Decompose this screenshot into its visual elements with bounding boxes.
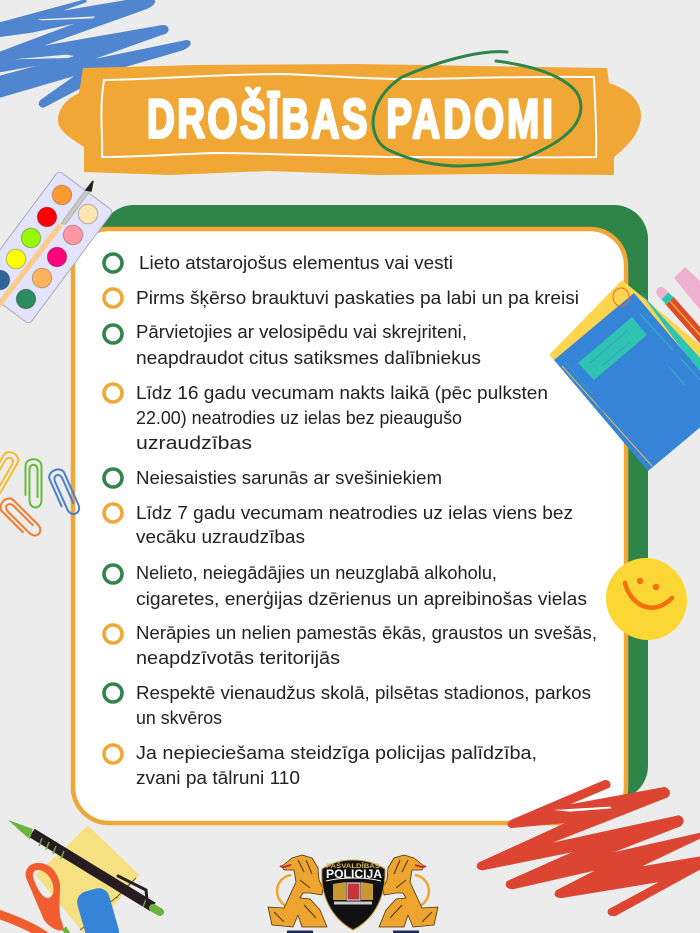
green clip — [26, 459, 42, 508]
tip 4 — [104, 382, 548, 453]
tip 6: Līdz 7 gadu vecumam neatrodies uz ielas viens bez — [136, 502, 573, 523]
green back panel — [100, 205, 648, 800]
title text: DROŠĪBAS — [147, 87, 367, 150]
tip 5: Neiesaisties sarunās ar svešiniekiem — [136, 467, 442, 488]
tip 8: neapdzīvotās teritorijās — [136, 647, 340, 668]
pen — [8, 820, 160, 912]
icon: ruler — [674, 267, 700, 312]
tip 9 — [104, 682, 591, 728]
tip 7 — [104, 562, 587, 609]
blue clip — [47, 467, 81, 518]
shield emblem — [326, 878, 381, 903]
icon: paper clips — [0, 449, 81, 541]
tip 6 — [104, 502, 573, 547]
eraser — [74, 886, 122, 933]
title banner — [58, 52, 641, 175]
note spiral lines — [80, 878, 136, 930]
icon: smiley — [606, 558, 687, 640]
shield text: PAŠVALDĪBAS — [326, 862, 380, 870]
shield text: POLICIJA — [326, 867, 382, 881]
banner shape — [58, 64, 641, 175]
ribbons — [287, 930, 419, 933]
scissors — [26, 863, 64, 931]
tip 9: un skvēros — [136, 707, 222, 728]
tip 6: vecāku uzraudzības — [136, 526, 305, 547]
yellow clip — [0, 449, 21, 499]
tip 3 — [104, 321, 481, 368]
sticky note — [37, 827, 138, 933]
tips list — [104, 252, 597, 788]
tip 9: Respektē vienaudžus skolā, pilsētas stadionos, parkos — [136, 682, 591, 703]
tip 7: cigaretes, enerģijas dzērienus un apreibinošas vielas — [136, 588, 587, 609]
icon: pencil — [661, 292, 700, 342]
icon: watercolor palette — [0, 171, 113, 324]
tip 8 — [104, 622, 597, 668]
tip 4: uzraudzības — [136, 432, 252, 453]
right lion — [379, 855, 438, 927]
hand-drawn circle — [373, 52, 581, 166]
shield — [322, 860, 385, 930]
tip 8: Nerāpies un nelien pamestās ēkās, graustos un svešās, — [136, 622, 597, 643]
title text: PADOMI — [386, 89, 553, 150]
tip 4: 22.00) neatrodies uz ielas bez pieaugušo — [136, 407, 462, 428]
tip 10 — [104, 742, 537, 788]
tip 3: neapdraudot citus satiksmes dalībniekus — [136, 347, 481, 368]
tip 1: Lieto atstarojošus elementus vai vesti — [139, 252, 453, 273]
icon: stationery — [0, 820, 160, 933]
tip 7: Nelieto, neiegādājies un neuzglabā alkoholu, — [136, 562, 497, 583]
tip 3: Pārvietojies ar velosipēdu vai skrejriteni, — [136, 321, 467, 342]
tip 10: Ja nepieciešama steidzīga policijas palīdzība, — [136, 742, 537, 763]
title text — [147, 87, 553, 150]
tip 4: Līdz 16 gadu vecumam nakts laikā (pēc pulksten — [136, 382, 548, 403]
left lion — [268, 855, 327, 927]
orange clip — [0, 496, 43, 541]
banner inner border — [101, 74, 596, 157]
tip 2: Pirms šķērso brauktuvi paskaties pa labi un pa kreisi — [136, 287, 579, 308]
logo: municipal police crest — [268, 855, 438, 932]
tip 10: zvani pa tālruni 110 — [136, 767, 300, 788]
blue scribble — [0, 1, 189, 106]
white main panel — [73, 229, 626, 823]
red scribble — [479, 782, 700, 914]
icon: blue notebook — [549, 280, 700, 471]
